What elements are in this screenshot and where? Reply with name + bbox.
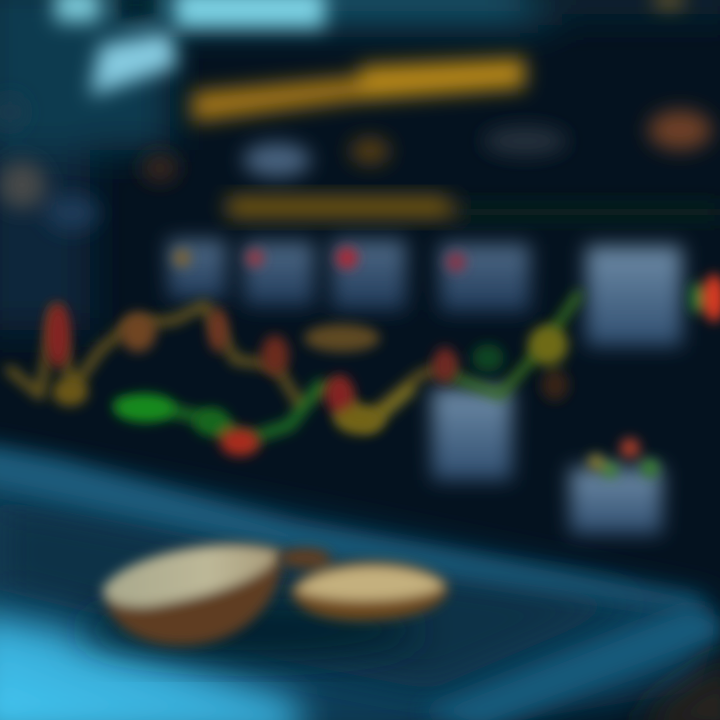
tablet body	[0, 450, 720, 720]
dark corner	[640, 650, 720, 720]
card row	[168, 240, 530, 312]
lower right edge	[420, 606, 720, 720]
tablet screen	[0, 500, 640, 690]
lower card centre	[432, 388, 512, 480]
bright corner	[0, 610, 300, 720]
coins	[80, 543, 448, 656]
stat cards	[168, 240, 682, 534]
coin shadow	[80, 604, 420, 656]
chart markers	[46, 303, 569, 456]
header labels row	[0, 96, 712, 231]
top-left light highlights	[55, 0, 683, 96]
card accents	[173, 247, 720, 478]
lower card right	[570, 468, 662, 534]
tablet edge highlight	[0, 445, 700, 612]
right coin	[279, 548, 448, 620]
top-left blurred window backdrop	[0, 0, 720, 330]
large card right	[586, 246, 682, 346]
subtitle: blurred amber line	[226, 196, 720, 219]
line chart: blurred candlesticks	[10, 295, 578, 440]
left coin	[102, 543, 282, 645]
tablet	[0, 445, 720, 720]
title: blurred yellow heading	[192, 58, 525, 122]
